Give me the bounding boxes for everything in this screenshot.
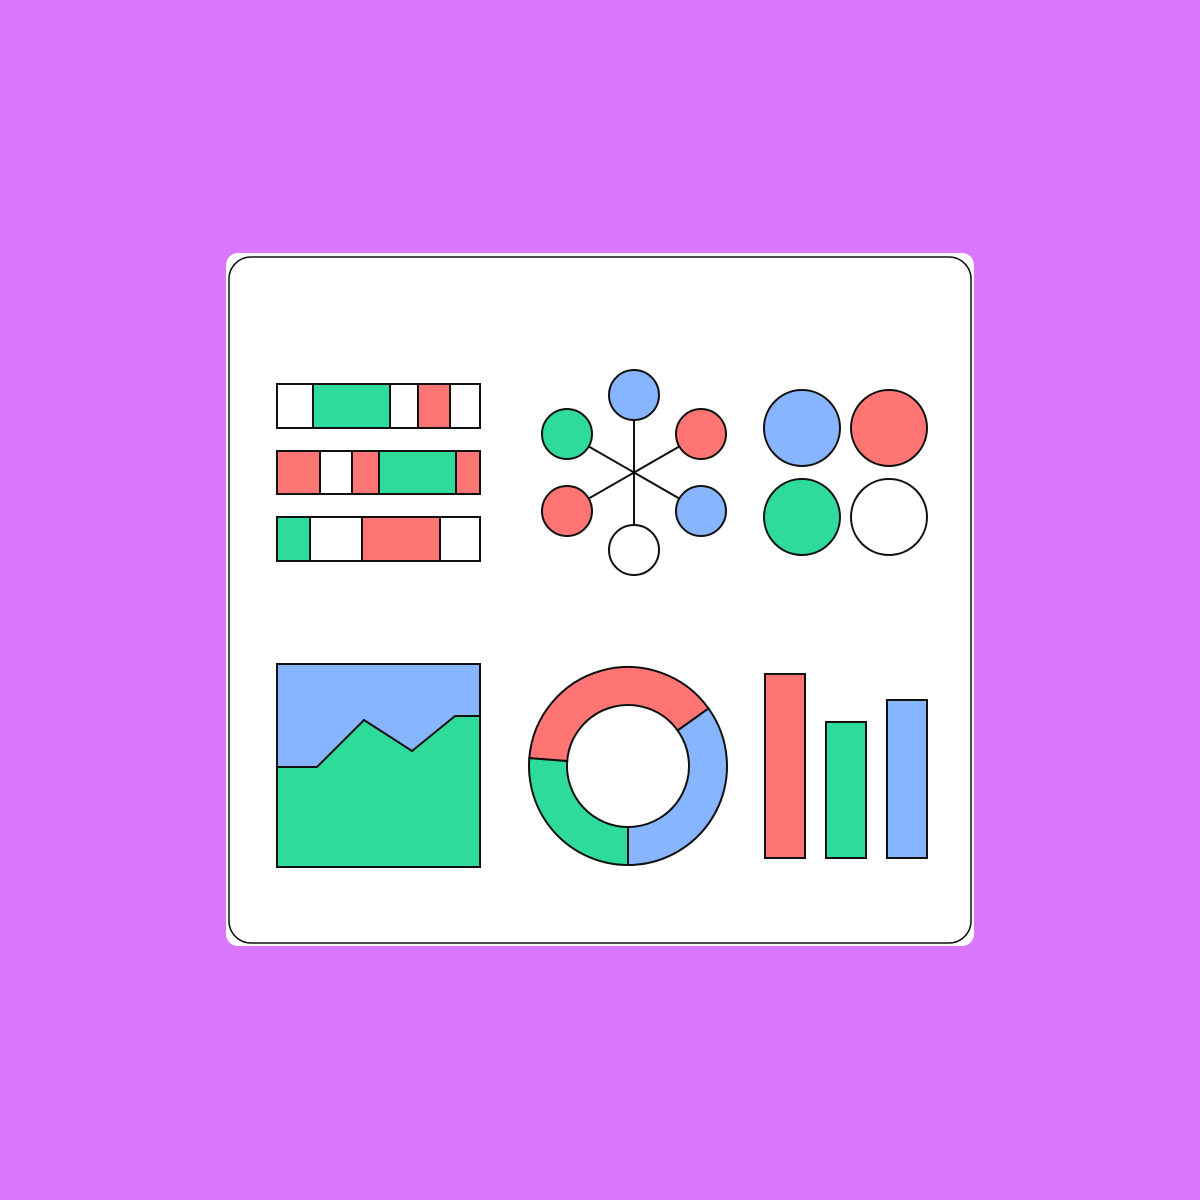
card panel [226, 253, 974, 946]
stacked bars [277, 384, 480, 561]
area chart [277, 664, 480, 867]
circle grid [764, 390, 927, 555]
bar chart [765, 674, 927, 858]
network diagram [542, 370, 726, 575]
donut chart [529, 667, 727, 865]
